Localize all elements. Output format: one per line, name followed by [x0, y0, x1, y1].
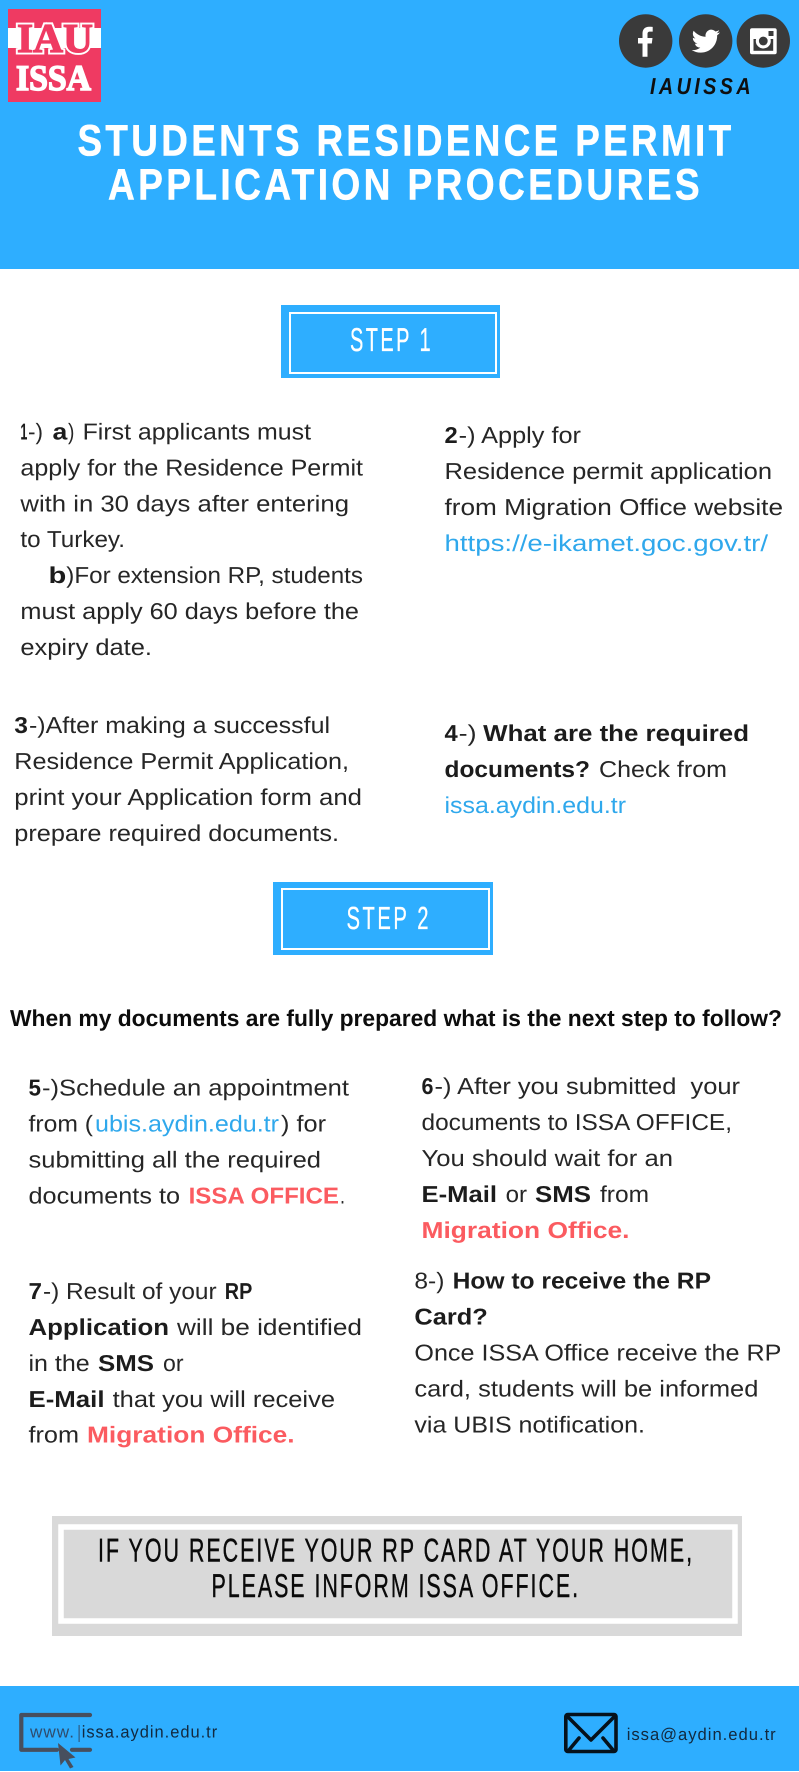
text block: item 1: b: [48, 562, 66, 588]
website url: issa.aydin.edu.tr: [82, 1723, 218, 1742]
text block: item 5: ubis.aydin.edu.tr: [95, 1110, 279, 1136]
text block: item 7: will be identified: [176, 1314, 362, 1340]
text block: item 3: Residence Permit Application,: [14, 748, 349, 774]
text block: item 1: to Turkey.: [20, 526, 125, 552]
text block: item 7: in the: [28, 1350, 90, 1376]
text block: item 6: [422, 1073, 740, 1243]
callout: RP card notice: [52, 1516, 742, 1636]
text block: item 4: issa.aydin.edu.tr: [444, 792, 626, 818]
text block: item 3: [14, 712, 362, 846]
text block: item 8: Card?: [414, 1304, 488, 1330]
text block: item 6: You should wait for an: [422, 1145, 673, 1171]
badge: step 1: STEP 1: [350, 321, 433, 358]
text block: item 6: documents to ISSA OFFICE,: [422, 1109, 732, 1135]
text block: item 4: -): [459, 720, 477, 746]
badge: step 1: [281, 305, 500, 378]
text block: item 3: print your Application form and: [14, 784, 362, 810]
text block: item 5: .: [340, 1182, 345, 1208]
panel: header: [0, 0, 799, 269]
subheading: When my documents are fully prepared what is the next step to follow?: [10, 1005, 782, 1031]
text block: item 3: 3: [14, 712, 28, 738]
text block: item 3: prepare required documents.: [14, 820, 339, 846]
text block: item 6: or: [506, 1181, 527, 1207]
website url: [29, 1723, 218, 1742]
icon: envelope: [566, 1714, 616, 1752]
text block: item 7: RP: [225, 1278, 252, 1304]
text block: item 4: documents?: [444, 756, 590, 782]
text block: item 2: 2: [444, 422, 458, 448]
callout: RP card notice: PLEASE INFORM ISSA OFFICE.: [212, 1567, 580, 1604]
text block: item 8: [414, 1268, 781, 1438]
title: APPLICATION PROCEDURES: [108, 160, 703, 210]
text block: item 5: 5: [28, 1074, 41, 1100]
text block: item 7: from: [28, 1422, 79, 1448]
text block: item 5: ISSA OFFICE: [189, 1182, 339, 1208]
text block: item 5: from (: [28, 1110, 93, 1136]
text block: item 1: must apply 60 days before the: [20, 598, 359, 624]
text block: item 7: [28, 1278, 362, 1448]
text block: item 4: What are the required: [483, 720, 749, 746]
text block: item 2: [444, 422, 783, 556]
text block: item 8: 8-): [414, 1268, 444, 1294]
icon: website cursor: [21, 1715, 90, 1768]
text block: item 4: Check from: [599, 756, 727, 782]
icon: instagram: [737, 14, 790, 68]
text block: item 6: -) After you submitted your: [434, 1073, 740, 1099]
text block: item 4: 4: [444, 720, 458, 746]
text block: item 1: First applicants must: [83, 418, 312, 444]
text block: item 7: SMS: [98, 1350, 154, 1376]
text block: item 8: card, students will be informed: [414, 1376, 758, 1402]
social handle: IAUISSA: [650, 73, 754, 99]
text block: item 5: ) for: [281, 1110, 326, 1136]
text block: item 2: from Migration Office website: [444, 494, 783, 520]
logo: IAU ISSA: [8, 9, 101, 102]
badge: step 2: STEP 2: [346, 900, 431, 936]
text block: item 6: from: [600, 1181, 649, 1207]
text block: item 2: Residence permit application: [444, 458, 772, 484]
text block: item 1: ): [68, 418, 74, 444]
text block: item 3: -)After making a successful: [29, 712, 330, 738]
text block: item 7: that you will receive: [113, 1386, 335, 1412]
text block: item 6: SMS: [535, 1181, 591, 1207]
text block: item 7: or: [163, 1350, 184, 1376]
text block: item 1: apply for the Residence Permit: [20, 454, 364, 480]
text block: item 7: E-Mail: [28, 1386, 104, 1412]
text block: item 1: 1: [20, 418, 28, 444]
logo: IAU ISSA: ISSA: [16, 58, 91, 98]
text block: item 1: a: [52, 418, 68, 444]
text block: item 5: submitting all the required: [28, 1146, 321, 1172]
panel: footer: [0, 1686, 799, 1771]
text block: item 1: expiry date.: [20, 634, 152, 660]
text block: item 7: Application: [28, 1314, 169, 1340]
text block: item 7: -) Result of your: [43, 1278, 217, 1304]
text block: item 5: [28, 1074, 350, 1208]
logo: IAU ISSA: IAU: [17, 15, 93, 61]
text block: item 4: [444, 720, 749, 818]
text block: item 7: 7: [28, 1278, 42, 1304]
text block: item 2: -) Apply for: [459, 422, 581, 448]
text block: item 6: Migration Office.: [422, 1217, 630, 1243]
text block: item 1: [19, 418, 364, 660]
text block: item 8: Once ISSA Office receive the RP: [414, 1340, 781, 1366]
text block: item 5: -)Schedule an appointment: [42, 1074, 350, 1100]
icon: twitter: [679, 14, 732, 68]
text block: item 5: documents to: [28, 1182, 180, 1208]
text block: item 6: E-Mail: [422, 1181, 497, 1207]
website url: www.: [29, 1723, 75, 1742]
text block: item 1: with in 30 days after entering: [19, 490, 349, 516]
text block: item 7: Migration Office.: [87, 1422, 295, 1448]
title: [78, 116, 734, 210]
badge: step 2: [273, 882, 493, 955]
text block: item 8: via UBIS notification.: [414, 1412, 645, 1438]
text block: item 2: https://e-ikamet.goc.gov.tr/: [444, 530, 769, 556]
logo: IAU ISSA: IAU: [17, 15, 93, 61]
email address: issa@aydin.edu.tr: [627, 1725, 777, 1744]
text block: item 1: )For extension RP, students: [66, 562, 363, 588]
icon: facebook: [619, 14, 672, 68]
text block: item 1: -): [28, 418, 43, 444]
text block: item 6: 6: [422, 1073, 434, 1099]
text block: item 8: How to receive the RP: [453, 1268, 711, 1294]
